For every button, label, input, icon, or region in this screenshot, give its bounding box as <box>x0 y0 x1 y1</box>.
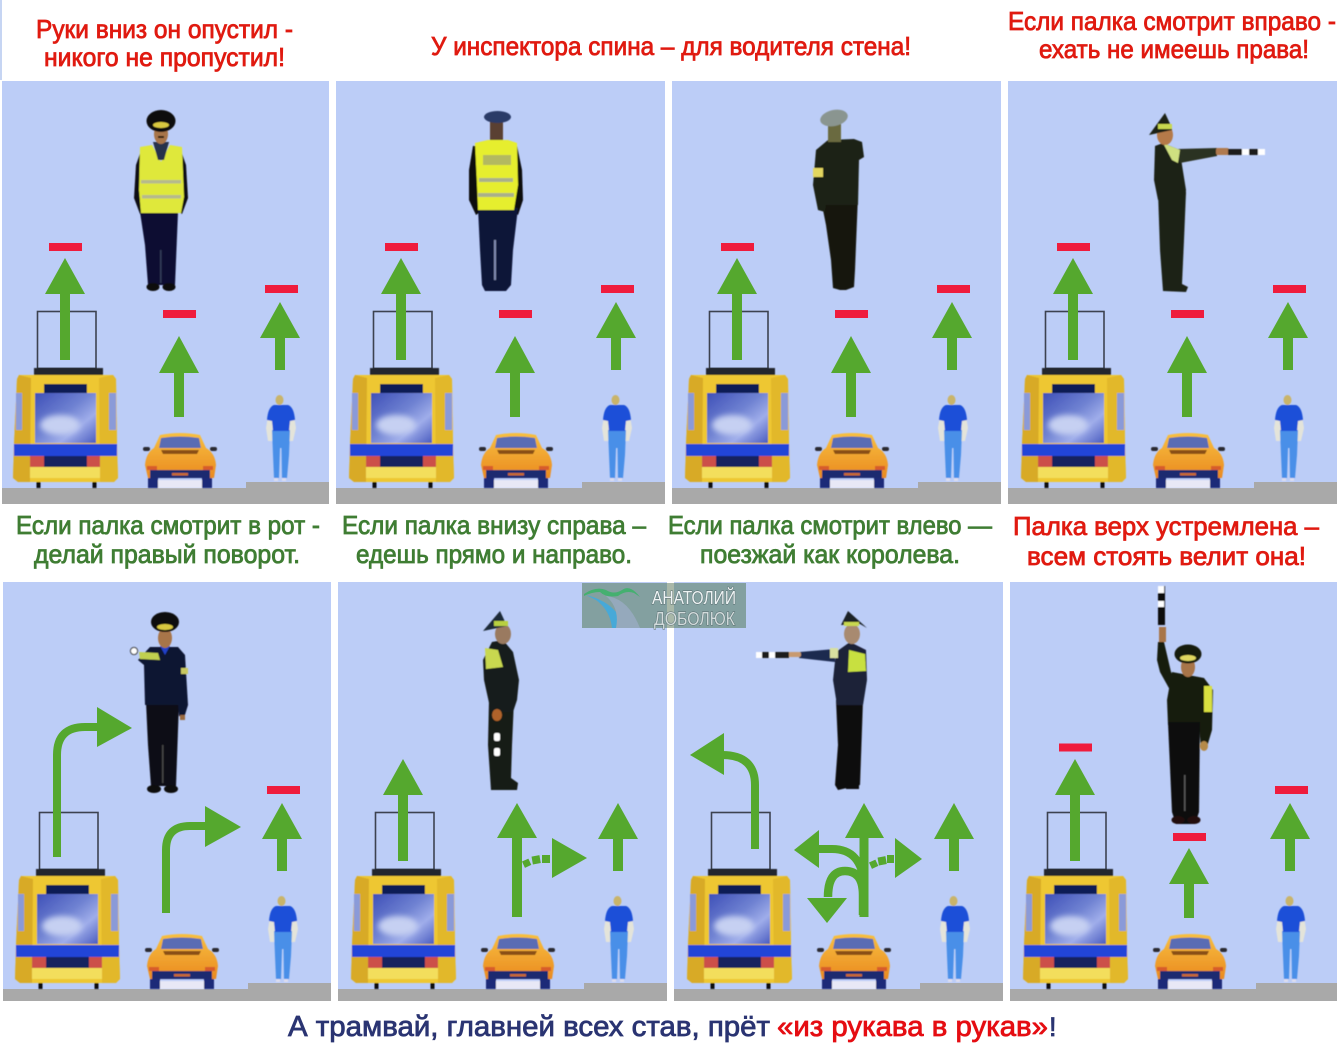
officer side view <box>483 611 519 790</box>
officer front pointing stick <box>130 612 188 793</box>
officer back with vest <box>469 111 523 291</box>
officer back dark <box>813 107 864 290</box>
caption: panel 5: Если палка смотрит в рот - <box>16 510 320 540</box>
pedestrian arrow <box>934 803 974 871</box>
logo: Анатолий Доболюк watermark: АНАТОЛИЙ <box>652 587 736 608</box>
caption: panel 6 <box>342 510 646 569</box>
dotted right-turn arrow <box>522 838 587 878</box>
caption: panel 7 <box>668 510 992 569</box>
caption: panel 6: едешь прямо и направо. <box>356 539 632 569</box>
caption: panel 5: делай правый поворот. <box>34 539 300 569</box>
caption: panel 6: Если палка внизу справа – <box>342 510 646 540</box>
vehicles and pedestrian <box>15 812 298 989</box>
vehicles and pedestrian <box>349 312 632 488</box>
pedestrian arrow <box>262 803 302 871</box>
heading: panel 1 rhyme <box>36 14 293 72</box>
stop bars and arrows <box>45 243 300 417</box>
panel: stick toward viewer, right turn <box>3 582 331 1001</box>
heading: panel 4 rhyme: ехать не имеешь права! <box>1039 34 1309 64</box>
car right-turn arrow <box>166 806 241 913</box>
heading: panel 4 rhyme <box>1008 6 1336 64</box>
heading: panel 1 rhyme: никого не пропустил! <box>44 42 285 72</box>
caption: panel 8: Палка верх устремлена – <box>1013 511 1320 541</box>
caption: panel 7: поезжай как королева. <box>700 539 960 569</box>
heading: panels 2-3 rhyme: У инспектора спина – для водителя стена! <box>431 31 911 61</box>
vehicles and pedestrian <box>1023 812 1306 989</box>
caption: panel 7: Если палка смотрит влево — <box>668 510 992 540</box>
vehicles and pedestrian <box>351 812 634 989</box>
logo: Анатолий Доболюк watermark: ДОБОЛЮК <box>654 609 735 629</box>
panel: stick raised <box>1010 582 1337 1001</box>
tram right-turn arrow <box>57 707 132 857</box>
officer side with stick left <box>756 611 867 790</box>
vehicles and pedestrian <box>687 812 970 989</box>
straight arrows <box>383 759 638 917</box>
panel: arms down, facing <box>2 81 329 504</box>
stop bars <box>1059 744 1308 841</box>
panel: stick to the right <box>1008 81 1337 504</box>
footer slogan: «из рукава в рукав» <box>777 1011 1048 1043</box>
stop bars and arrows <box>381 243 636 417</box>
footer slogan <box>288 1011 1057 1043</box>
decorative left edge <box>0 0 2 80</box>
panel: back to driver with vest <box>336 81 665 504</box>
panel: stick down right, side view <box>338 582 667 1001</box>
heading: panel 1 rhyme: Руки вниз он опустил - <box>36 14 293 44</box>
caption: panel 8 <box>1013 511 1320 571</box>
vehicles and pedestrian <box>685 312 968 488</box>
caption: panel 5 <box>16 510 320 569</box>
officer with raised stick <box>1157 586 1213 824</box>
vehicles and pedestrian <box>13 312 296 488</box>
logo: Анатолий Доболюк watermark <box>582 583 746 629</box>
panel: back to driver dark uniform <box>672 81 1001 504</box>
arrows <box>1055 759 1310 918</box>
stop bar <box>267 786 300 794</box>
officer side with stick <box>1149 113 1265 292</box>
stop bars and arrows <box>1053 243 1308 417</box>
captions row between top and bottom panels <box>16 510 1320 571</box>
tram left-turn arrow <box>690 733 755 849</box>
stop bars and arrows <box>717 243 972 417</box>
officer front with vest <box>134 110 188 291</box>
vehicles and pedestrian <box>1021 312 1304 488</box>
caption: panel 8: всем стоять велит она! <box>1027 541 1306 571</box>
footer slogan: А трамвай, главней всех став, прёт <box>288 1011 770 1043</box>
footer slogan: ! <box>1049 1012 1057 1042</box>
car multi-direction arrow <box>794 803 922 923</box>
panel: stick to the left, all turns <box>674 582 1003 1001</box>
